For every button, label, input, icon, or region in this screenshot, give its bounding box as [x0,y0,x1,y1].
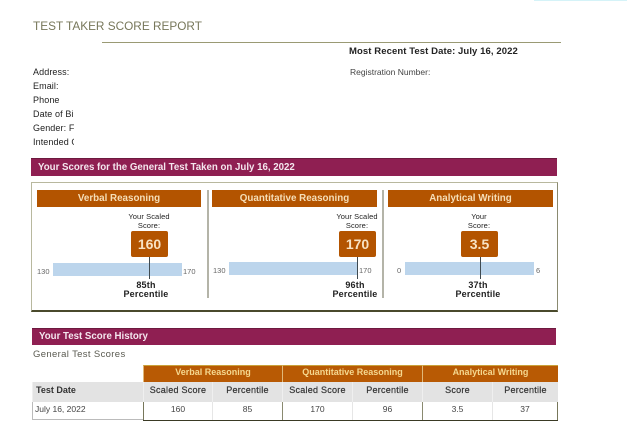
verbal scale minimum: 130 [37,267,50,276]
analytical score value [422,402,492,420]
quantitative score box [339,231,376,257]
verbal scaled score value [143,402,212,420]
verbal percentile value [212,402,282,420]
verbal percentile: 85th [136,280,156,290]
banner: score history [32,328,556,345]
most recent test date: Most Recent Test Date: July 16, 2022 [349,46,518,57]
quantitative percentile value [352,402,422,420]
verbal score box [131,231,168,257]
subheading: general test scores: General Test Scores [33,349,126,360]
gender label: Gender: F [33,123,74,133]
banner: current scores [31,158,557,176]
quantitative scaled score header [282,382,352,402]
quantitative percentile header [352,382,422,402]
analytical score box: 3.5 [470,236,489,252]
registration number: Registration Number: [350,67,430,77]
verbal percentile [123,280,169,299]
quantitative scaled score value: 170 [310,404,325,414]
quantitative heading [212,190,377,207]
verbal scaled score value: 160 [171,404,185,414]
analytical score value: 3.5 [452,404,463,414]
analytical column header [422,365,558,382]
panel: quantitative reasoning [212,190,378,299]
quantitative scaled score header: Scaled Score [289,385,346,395]
analytical percentile header [492,382,558,402]
analytical score caption [468,212,490,230]
test date header: Test Date [36,385,76,395]
analytical column header: Analytical Writing [453,367,528,377]
verbal score caption: Your Scaled [128,212,170,221]
quantitative range bar [229,262,358,275]
verbal percentile: Percentile [123,289,169,299]
email label: Email: [33,81,59,91]
analytical percentile header: Percentile [504,385,547,395]
verbal scale maximum: 170 [183,267,196,276]
analytical percentile value [492,402,558,420]
test date value [32,402,143,420]
panel: analytical writing [388,190,553,299]
quantitative percentile value: 96 [383,404,392,414]
analytical percentile value: 37 [520,404,530,414]
verbal percentile header: Percentile [226,385,269,395]
verbal percentile value: 85 [243,404,252,414]
table: score history [32,365,558,421]
quantitative heading: Quantitative Reasoning [240,193,349,204]
quantitative score caption: Score: [346,220,368,230]
analytical score caption: Score: [468,220,490,230]
quantitative percentile: 96th [345,280,365,290]
top edge tint [534,0,627,1]
verbal score caption: Score: [138,220,160,230]
analytical range bar [405,262,534,275]
verbal score box: 160 [138,236,161,252]
verbal score marker [149,257,150,279]
candidate details [33,67,74,147]
quantitative percentile header: Percentile [366,385,409,395]
test date value: July 16, 2022 [35,404,86,414]
analytical scale maximum: 6 [536,266,540,275]
quantitative scaled score value [282,402,352,420]
quantitative score caption [336,212,378,230]
analytical score header: Score [445,385,470,395]
verbal scaled score header: Scaled Score [150,385,206,395]
analytical score box [461,231,498,257]
quantitative score box: 170 [346,236,369,252]
verbal range bar [53,263,182,276]
analytical heading: Analytical Writing [429,193,512,204]
verbal score caption [128,212,170,230]
quantitative scale minimum: 130 [213,266,226,275]
analytical heading [388,190,553,207]
analytical scale minimum: 0 [397,266,401,275]
analytical percentile [455,280,501,299]
quantitative percentile: Percentile [332,289,378,299]
panel: verbal reasoning [37,190,201,299]
quantitative percentile [332,280,378,299]
verbal scaled score header [143,382,212,402]
quantitative column header [282,365,422,382]
analytical percentile: 37th [468,280,488,290]
quantitative column header: Quantitative Reasoning [302,367,403,377]
banner: score history: Your Test Score History [39,331,148,342]
banner: current scores: Your Scores for the General Test Taken on July 16, 2022 [38,162,295,173]
address label: Address: [33,67,69,77]
verbal column header: Verbal Reasoning [175,367,251,377]
verbal heading: Verbal Reasoning [78,193,160,204]
verbal column header [143,365,282,382]
test date header [32,382,143,402]
title: TEST TAKER SCORE REPORT [33,19,202,33]
verbal heading [37,190,201,207]
analytical score marker [480,257,481,279]
panel: score summary [31,182,558,312]
quantitative scale maximum: 170 [359,266,372,275]
analytical score caption: Your [471,212,487,221]
phone label: Phone [33,95,60,105]
analytical percentile: Percentile [455,289,501,299]
quantitative score marker [357,257,358,279]
verbal percentile header [212,382,282,402]
analytical score header [422,382,492,402]
quantitative score caption: Your Scaled [336,212,378,221]
